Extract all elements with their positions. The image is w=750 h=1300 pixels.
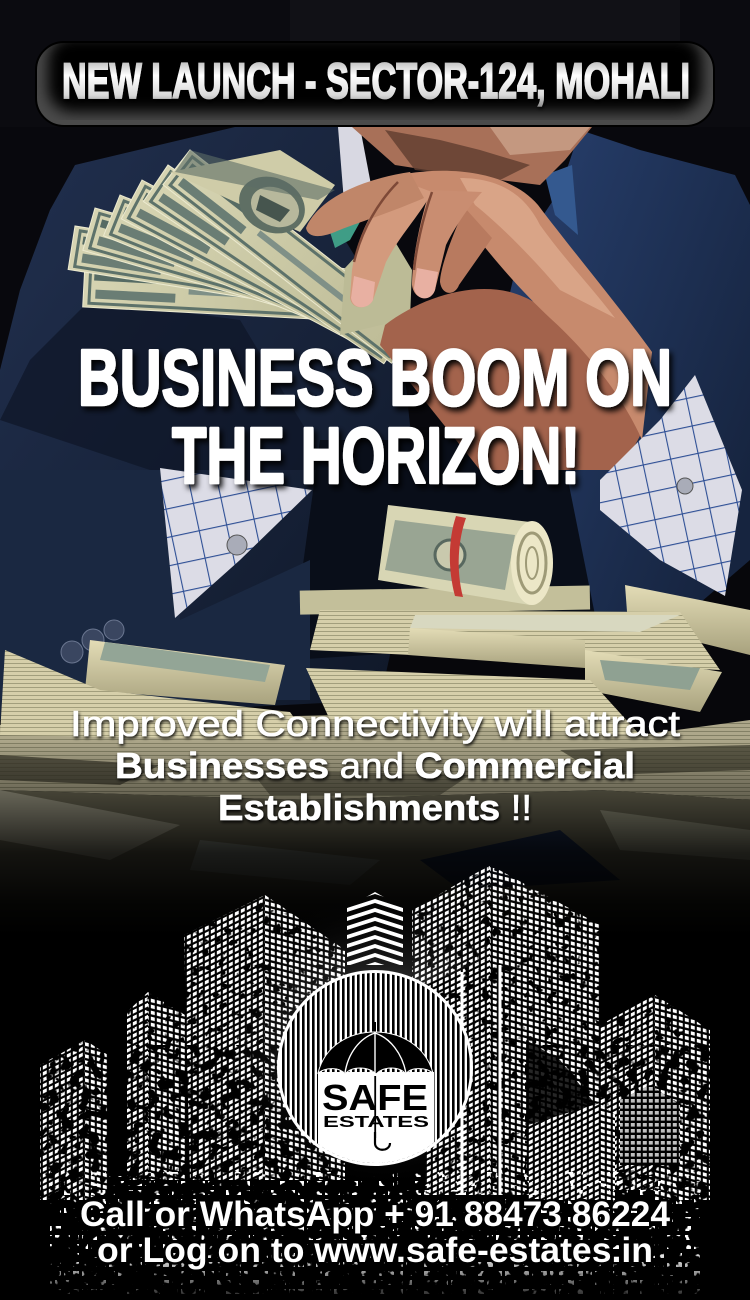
glow behind buildings [215, 890, 555, 1190]
logo wordmark: SAFE [322, 1077, 428, 1118]
neck and chin [352, 127, 592, 185]
fingers and fist [306, 171, 652, 470]
headline: THE HORIZON! [172, 411, 580, 500]
upper tower faces [78, 865, 710, 1045]
cash roll with red band [378, 505, 553, 605]
connectivity message [70, 703, 680, 828]
logo wordmark: ESTATES [323, 1114, 429, 1131]
fade to black overlay [0, 740, 750, 935]
jacket centre shadow [290, 440, 600, 660]
headline [78, 333, 672, 500]
back of hand [400, 171, 652, 440]
banner plate [36, 36, 714, 126]
index finger [350, 180, 432, 307]
suit jacket left [0, 127, 420, 720]
bottom fade over lights [0, 1250, 750, 1300]
logo: Safe Estates umbrella badge [277, 970, 473, 1172]
connectivity message: Establishments !! [218, 787, 532, 828]
third finger [440, 208, 492, 293]
sparse lower city lights [50, 1170, 700, 1295]
shirt cuffs with blue check pattern [160, 375, 742, 618]
dissolving lower tower faces [40, 1045, 710, 1200]
grey block [620, 1085, 680, 1165]
umbrella [318, 1022, 433, 1150]
suit jacket right [480, 130, 750, 640]
fan of dollar bills [68, 150, 419, 364]
city skyline [40, 865, 710, 1294]
back stacks [300, 586, 590, 615]
contact details [80, 1195, 671, 1270]
lower stacks [0, 715, 750, 800]
businessman in suit [0, 127, 750, 720]
chevron tower [347, 892, 403, 965]
contact details: Call or WhatsApp + 91 88473 86224 [80, 1195, 671, 1234]
main centre stacks [310, 610, 720, 670]
thumb [306, 172, 424, 236]
top banner [36, 36, 714, 126]
front tower [425, 958, 525, 1195]
shirt and collar [338, 127, 372, 215]
connectivity message: Improved Connectivity will attract [70, 703, 680, 744]
dark gap between towers [526, 1040, 600, 1140]
buttons on sleeve [61, 620, 124, 663]
logo wordmark [322, 1077, 429, 1131]
pile of cash stacks [0, 585, 750, 935]
lower black panel [0, 935, 750, 1300]
contact details: or Log on to www.safe-estates.in [97, 1231, 653, 1270]
front low block [528, 1103, 615, 1200]
connectivity message: Businesses and Commercial [115, 745, 635, 786]
left stacks [85, 640, 285, 705]
badge circle [277, 970, 473, 1166]
middle finger [412, 190, 482, 298]
lower hand [380, 289, 642, 470]
hand holding cash fan [68, 150, 652, 470]
